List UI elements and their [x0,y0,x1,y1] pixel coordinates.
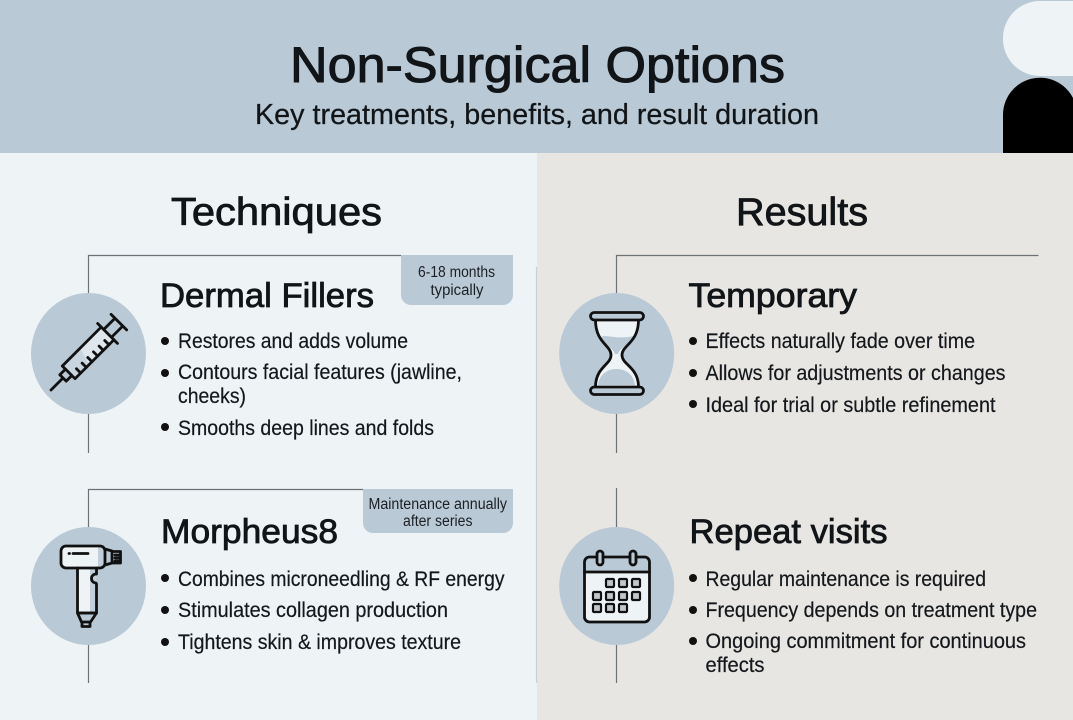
badge: maintenance annually after series [363,489,513,533]
panel: repeat visits [559,488,1037,683]
badge: 6-18 months typically: 6-18 months [418,264,495,281]
badge: 6-18 months typically: typically [430,282,484,299]
heading: results: Results [736,191,868,234]
list: dermal fillers benefits: Smooths deep lines and folds [178,417,434,440]
icon: hourglass [559,293,674,414]
list: temporary effects: Effects naturally fade over time [706,330,975,353]
decoration: pale pill [1003,1,1073,76]
panel: results background [537,153,1073,720]
badge: maintenance annually after series: Maintenance annually [368,496,507,513]
list: dermal fillers benefits: Restores and adds volume [178,330,408,353]
list: temporary effects: Allows for adjustments or changes [706,362,1006,385]
heading: dermal fillers: Dermal Fillers [160,277,374,315]
list: repeat visit details: effects [706,654,764,677]
list: morpheus8 benefits: Combines microneedling & RF energy [178,568,505,591]
heading: repeat visits: Repeat visits [690,513,888,551]
list: temporary effects: Ideal for trial or subtle refinement [706,394,996,417]
list: dermal fillers benefits [161,330,462,440]
list: dermal fillers benefits: cheeks) [178,385,246,408]
list: repeat visit details: Ongoing commitment for continuous [706,630,1026,653]
list: repeat visit details [689,568,1037,677]
panel: temporary [559,256,1038,453]
heading: temporary: Temporary [688,277,857,315]
panel: header [0,0,1073,153]
panel: dermal fillers [31,255,513,453]
icon: syringe [31,293,146,414]
icon: calendar [559,527,674,645]
title: Non-Surgical Options [290,37,785,93]
panel: morpheus8 [31,489,513,683]
icon: RF microneedling handpiece [31,527,146,645]
list: temporary effects [689,330,1006,417]
list: morpheus8 benefits: Tightens skin & improves texture [178,631,461,654]
list: repeat visit details: Frequency depends on treatment type [706,599,1037,622]
list: morpheus8 benefits [161,568,505,654]
subtitle: Key treatments, benefits, and result duration [255,99,819,131]
heading: techniques: Techniques [171,191,382,234]
decoration: black arch [1003,78,1073,153]
list: morpheus8 benefits: Stimulates collagen production [178,599,448,622]
heading: morpheus8: Morpheus8 [161,513,338,551]
badge: 6-18 months typically [401,255,513,305]
badge: maintenance annually after series: after series [403,513,473,530]
panel: techniques background [0,153,537,720]
list: dermal fillers benefits: Contours facial features (jawline, [178,361,462,384]
list: repeat visit details: Regular maintenance is required [706,568,986,591]
